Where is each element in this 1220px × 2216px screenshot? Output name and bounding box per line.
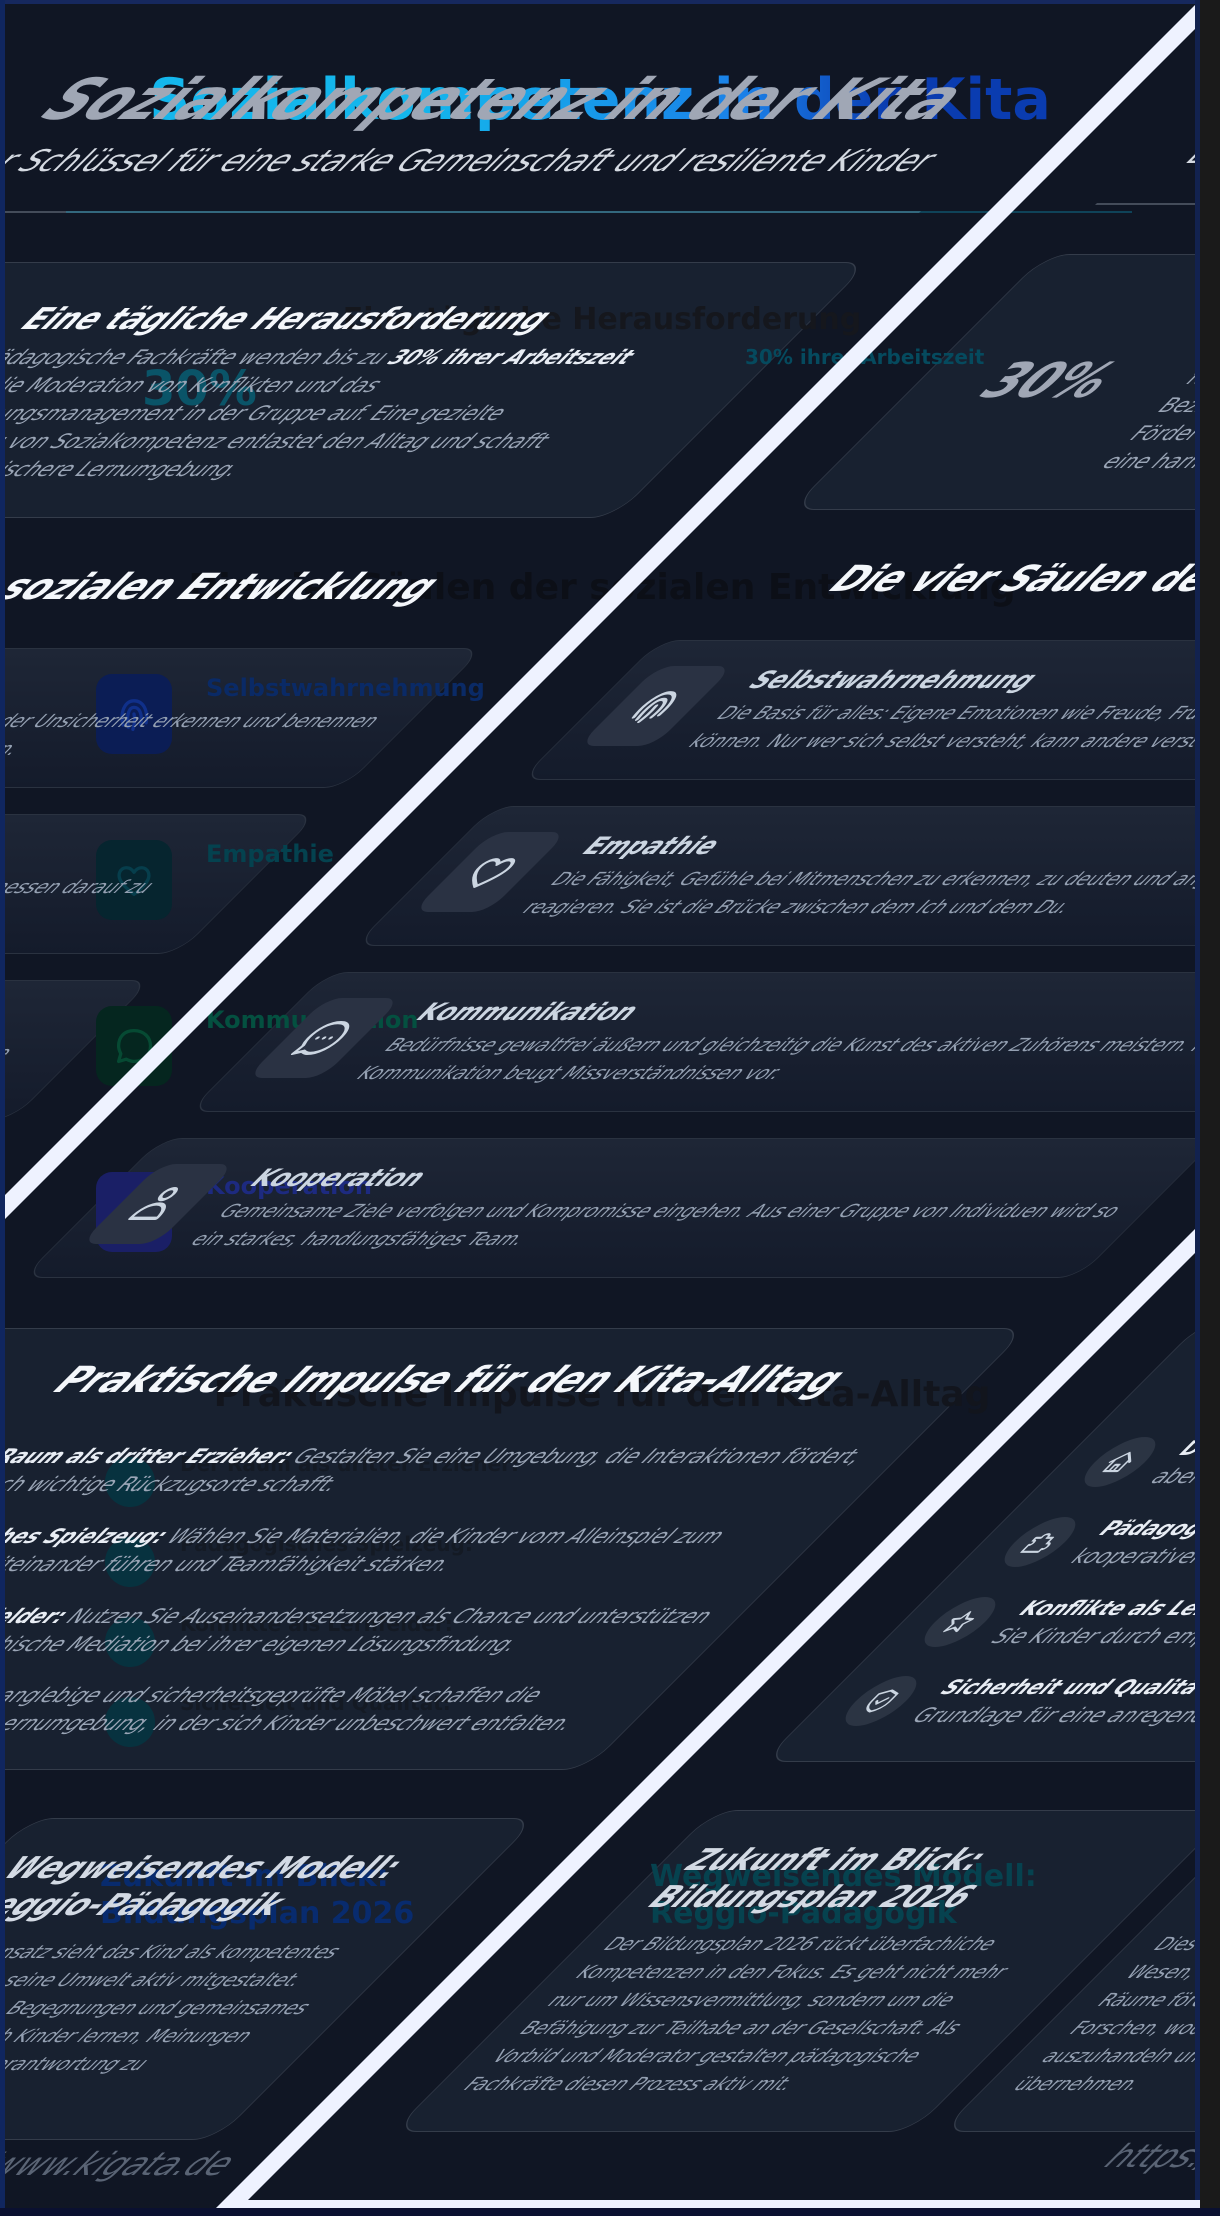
ghost heading: challenge: Eine tägliche Herausforderung <box>343 302 861 337</box>
heading: Empathie: Empathie <box>574 832 730 860</box>
divider <box>0 211 921 213</box>
text: Reggio wrapped: übernehmen. <box>1007 2074 1149 2095</box>
ghost circle 1 <box>105 1457 155 1507</box>
text: impulse 1 <box>0 1444 873 1496</box>
ghost heading: Selbstwahrnehmung: Selbstwahrnehmung <box>206 674 485 702</box>
panel: Kommunikation wrapped <box>188 972 1220 1112</box>
icon: puzzle <box>990 1517 1090 1567</box>
title: Sozialkompetenz in der Kita <box>20 67 988 133</box>
text: Bildungsplan: Vorbild und Moderator gestalten pädagogische <box>485 2046 928 2067</box>
ghost divider <box>66 211 1132 213</box>
ghost icon: Selbstwahrnehmung <box>96 674 172 754</box>
text: Kommunikation wrapped: Kommunikation beugt Missverständnissen vor. <box>350 1063 790 1084</box>
text: Selbstwahrnehmung <box>0 711 386 760</box>
heading: Reggio: Wegweisendes Modell: <box>0 1851 414 1886</box>
text: impulse 4 wrapped <box>905 1675 1200 1727</box>
heading: impulses: Praktische Impulse für den Kita-Alltag <box>41 1360 858 1401</box>
text: Empathie wrapped: reagieren. Sie ist die Brücke zwischen dem Ich und dem Du. <box>516 897 1079 918</box>
text: Reggio wrapped <box>1007 1934 1200 2095</box>
text: Bildungsplan: Der Bildungsplan 2026 rückt überfachliche <box>597 1934 1004 1955</box>
heading: challenge: Eine tägliche Herausforderung <box>10 302 563 337</box>
ghost icon: Kommunikation <box>96 1006 172 1086</box>
ghost circle 2 <box>105 1537 155 1587</box>
right dark margin <box>1200 0 1220 2216</box>
text: Bildungsplan: Fachkräfte diesen Prozess aktiv mit. <box>457 2074 802 2095</box>
ghost heading: Reggio: Reggio-Pädagogik <box>650 1896 957 1931</box>
ghost big number: 30% <box>142 361 257 417</box>
panel: daily challenge <box>0 262 870 518</box>
text: Kommunikation wrapped <box>350 1035 1200 1084</box>
ghost heading: Reggio: Wegweisendes Modell: <box>650 1859 1037 1894</box>
ghost label 1: Der Raum als dritter Erzieher: <box>180 1452 519 1476</box>
heading: Selbstwahrnehmung: Selbstwahrnehmung <box>740 666 1047 694</box>
ghost icon: Empathie <box>96 840 172 920</box>
panel: Empathie <box>0 814 318 954</box>
ghost heading: pillars: Die vier Säulen der sozialen Entwicklung <box>188 567 1016 608</box>
ghost heading: Bildungsplan: Zukunft im Blick: <box>100 1859 389 1894</box>
text: Selbstwahrnehmung wrapped <box>682 703 1200 752</box>
text: Kooperation: ein starkes, handlungsfähiges Team. <box>184 1229 533 1250</box>
ghost heading: Bildungsplan: Bildungsplan 2026 <box>100 1896 414 1931</box>
icon: team <box>80 1164 236 1244</box>
panel: Bildungsplan 2026 wrapped <box>392 1810 1220 2132</box>
heading: Bildungsplan: Bildungsplan 2026 <box>637 1880 986 1915</box>
text: Bildungsplan: Kompetenzen in den Fokus. Es geht nicht mehr <box>569 1962 1015 1983</box>
text: challenge <box>0 345 643 481</box>
text: impulse 2 <box>0 1524 734 1576</box>
bottom navy margin <box>0 2208 1220 2216</box>
left edge strip <box>0 0 5 2208</box>
text: Empathie wrapped <box>516 869 1200 918</box>
right edge strip <box>1195 0 1200 2208</box>
text: Kooperation: Gemeinsame Ziele verfolgen und Kompromisse eingehen. Aus einer Gruppe von Individuen wird so <box>212 1201 1127 1222</box>
ghost heading: impulses: Praktische Impulse für den Kita-Alltag <box>214 1374 990 1415</box>
icon: home <box>1070 1437 1170 1487</box>
panel: Reggio-Pädagogik <box>0 1818 538 2140</box>
ghost icon: Kooperation <box>96 1172 172 1252</box>
text: Bildungsplan: nur um Wissensvermittlung, sondern um die <box>541 1990 962 2011</box>
panel: Reggio-Pädagogik wrapped <box>940 1810 1220 2132</box>
text: impulse 4 <box>0 1683 583 1735</box>
card backgrounds, second wrap <box>406 1332 1195 2132</box>
big number: 30% <box>963 353 1134 409</box>
icon: shield <box>831 1676 931 1726</box>
icon: fingerprint <box>578 666 734 746</box>
heading: Reggio <box>0 1851 414 1923</box>
panel: daily challenge wrapped <box>790 254 1220 510</box>
panel: practical impulses wrapped <box>762 1320 1220 1762</box>
ghost heading: Kommunikation: Kommunikation <box>206 1006 419 1034</box>
text: impulse 3 <box>0 1604 721 1656</box>
panel: Bildungsplan 2026 <box>0 1818 2 2140</box>
panel: Empathie wrapped <box>354 806 1220 946</box>
content, second wrap <box>457 1436 1200 2175</box>
divider wrapped <box>1095 203 1220 205</box>
panel: Selbstwahrnehmung <box>0 648 484 788</box>
icon: chat bubble <box>246 998 402 1078</box>
ghost label 4: Sicherheit und Qualität: <box>180 1691 451 1715</box>
heading: Kooperation: Kooperation <box>242 1164 436 1192</box>
text: Bildungsplan: Befähigung zur Teilhabe an der Gesellschaft. Als <box>513 2018 968 2039</box>
top edge bar <box>0 0 1200 4</box>
ghost heading: Bildungsplan <box>100 1859 414 1931</box>
ghost label 2: Pädagogisches Spielzeug: <box>180 1532 473 1556</box>
icon: heart <box>412 832 568 912</box>
icon: conflict <box>910 1597 1010 1647</box>
text: Kooperation <box>184 1201 1127 1250</box>
ghost circle 4 <box>105 1697 155 1747</box>
ghost heading: Kooperation: Kooperation <box>206 1172 372 1200</box>
heading: Bildungsplan <box>637 1843 998 1915</box>
ghost label 3: Konflikte als Lernfelder: <box>180 1612 453 1636</box>
ghost circle 3 <box>105 1617 155 1667</box>
ghost highlight: 30% ihrer Arbeitszeit <box>745 345 984 369</box>
text: Bildungsplan <box>457 1934 1015 2095</box>
ghost icon row: impulses <box>105 1452 519 1747</box>
ghost heading: Reggio <box>650 1859 1037 1931</box>
panel: Kommunikation <box>0 980 152 1120</box>
text: impulse 2 wrapped <box>1064 1516 1200 1568</box>
ghost heading: Empathie: Empathie <box>206 840 334 868</box>
bottom white row <box>224 2200 1200 2208</box>
heading: Kommunikation: Kommunikation <box>408 998 649 1026</box>
text: impulse 1 wrapped <box>1144 1436 1200 1488</box>
panel: Selbstwahrnehmung wrapped <box>520 640 1220 780</box>
panel: Kooperation <box>22 1138 1218 1278</box>
ghost title: Sozialkompetenz in der Kita <box>149 67 1051 133</box>
text: challenge wrapped <box>1095 365 1200 473</box>
heading: Bildungsplan: Zukunft im Blick: <box>674 1843 998 1878</box>
text: Reggio <box>0 1942 347 2075</box>
text: impulse 3 wrapped <box>984 1596 1200 1648</box>
panel: practical impulses <box>0 1328 1028 1770</box>
